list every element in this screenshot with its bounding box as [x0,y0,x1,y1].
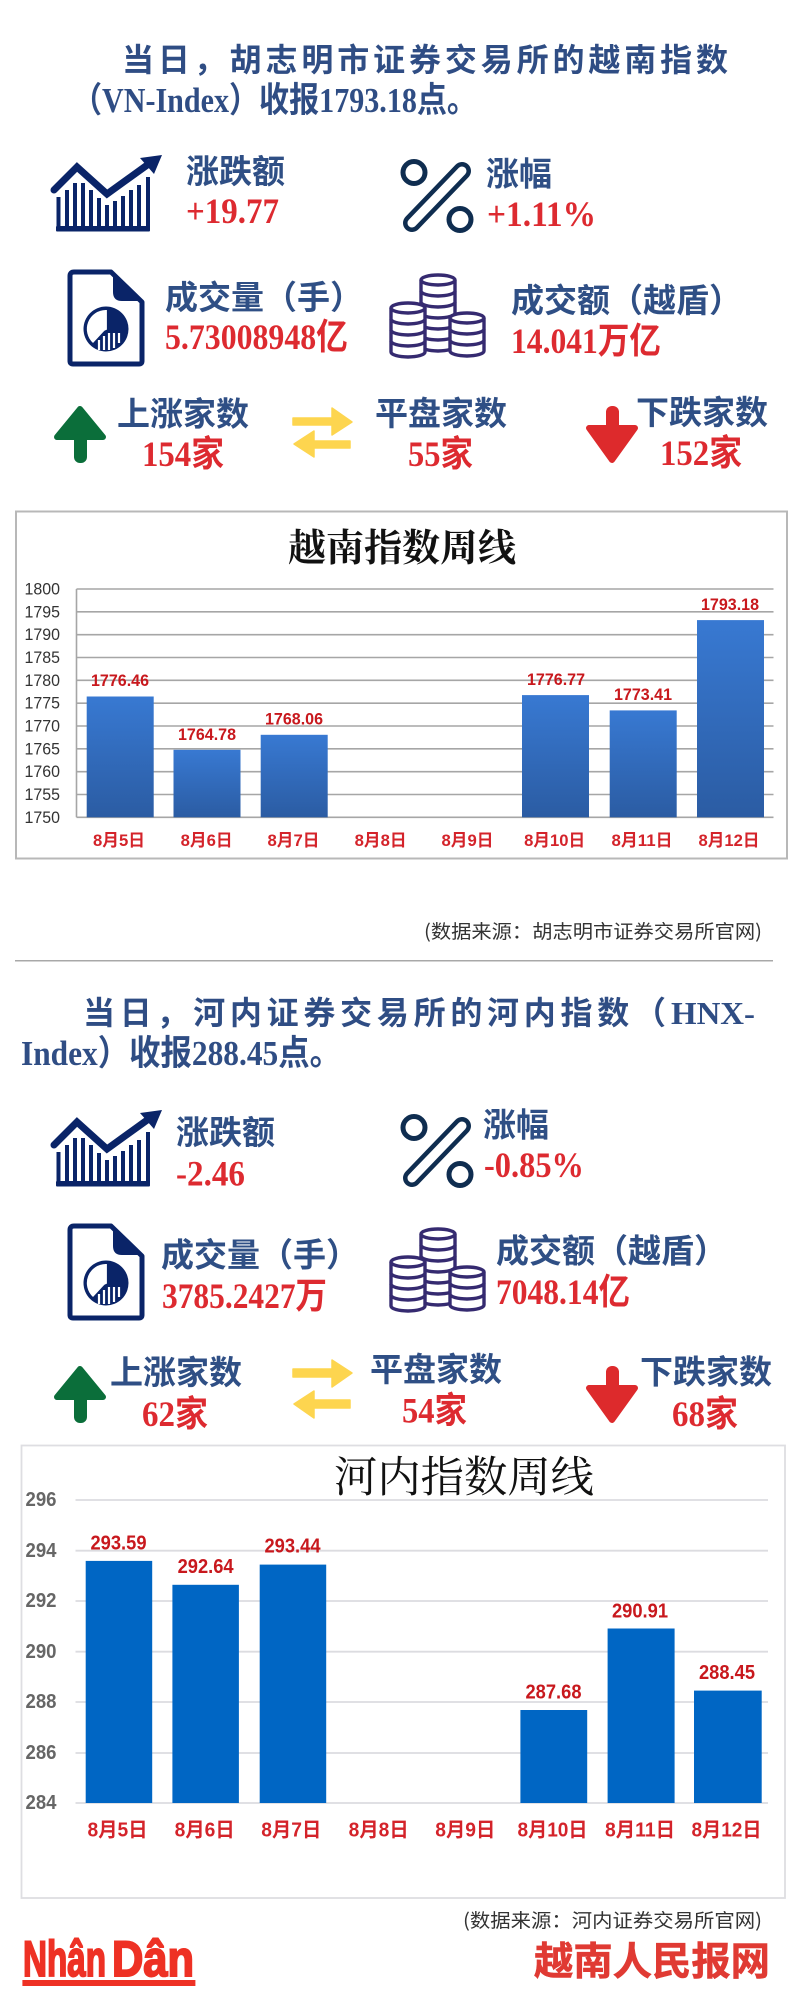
heading: VN-Index: 当日，胡志明市证券交易所的越南指数 [122,35,728,81]
stat: advancers: 上涨家数 [117,388,249,436]
bar value labels: 293.59 [90,1532,146,1554]
heading: HNX-Index [21,988,755,1073]
stat: volume: 成交量（手） [161,1228,359,1276]
heading: VN-Index [72,35,728,120]
date labels: 8月9日 [442,831,494,850]
heading: HNX-Index: HNX- [671,995,755,1031]
date labels: 8月10日 [524,831,585,850]
stat: change percent: 涨幅 [483,1098,549,1146]
stat: advancers [110,1346,242,1434]
stat: advancers: 上涨家数 [110,1346,242,1394]
bars [87,620,764,817]
y axis labels: 286 [26,1742,56,1764]
bars [86,1561,762,1803]
stat: turnover [496,1224,727,1312]
icon: down arrow [589,1366,635,1420]
stat: advancers [117,388,249,474]
stat: volume: 3785.2427万 [162,1276,327,1316]
bar value labels: 290.91 [612,1600,668,1622]
y axis labels: 288 [26,1691,56,1713]
stat: change percent: -0.85% [484,1145,584,1185]
stat: advancers: 62家 [142,1394,208,1434]
stat: volume [161,1228,359,1316]
stat: change amount: 涨跌额 [176,1106,275,1154]
bar value labels: 288.45 [699,1662,755,1684]
y axis labels [24,580,60,827]
stat: turnover: 成交额（越盾） [496,1224,727,1272]
stat: decliners: 下跌家数 [636,386,768,434]
stat: decliners [640,1346,772,1434]
bar value labels: 293.44 [264,1536,321,1558]
y axis labels: 1760 [24,762,60,781]
stat: decliners: 68家 [672,1394,738,1434]
stat: unchanged [370,1343,502,1430]
stat: change percent: +1.11% [487,194,596,234]
bar value labels: 1773.41 [614,685,672,704]
stat: change amount [186,145,285,231]
stat: change amount: 涨跌额 [186,145,285,193]
date labels: 8月6日 [181,831,233,850]
bar value labels: 1768.06 [265,710,323,728]
bar value labels: 1793.18 [701,595,759,614]
y axis labels: 1800 [24,580,60,598]
y axis labels: 1755 [24,785,60,804]
y axis labels [26,1489,57,1814]
stat: turnover [511,274,742,361]
icon: up arrow [57,409,103,463]
date labels: 8月10日 [518,1820,588,1842]
stat: unchanged: 54家 [402,1390,467,1430]
icon: swap arrows [293,1360,352,1418]
date labels: 8月12日 [698,831,760,850]
date labels: 8月8日 [349,1820,409,1842]
stat: change amount: +19.77 [186,191,279,231]
stat: volume: 成交量（手） [165,271,363,319]
date labels: 8月5日 [88,1820,148,1842]
bar value labels [91,595,759,744]
bar value labels [90,1532,755,1704]
icon: swap arrows [293,408,352,457]
y axis labels: 1765 [24,739,60,758]
source note: (数据来源：胡志明市证券交易所官网) [424,917,762,944]
y axis labels: 1775 [24,694,60,713]
y axis labels: 296 [26,1489,56,1511]
date labels: 8月6日 [175,1820,235,1842]
stat: turnover: 14.041万亿 [511,321,661,361]
bar value labels: 292.64 [178,1556,234,1578]
y axis labels: 284 [26,1792,57,1814]
logo: Nhan Dan: Nhân [23,1931,106,1987]
y axis labels: 1770 [24,716,60,736]
icon: percent [403,1116,471,1186]
icon: percent [403,162,471,230]
icon: coins [391,1229,484,1311]
source note: (数据来源：河内证券交易所官网) [463,1906,762,1933]
stat: change amount: -2.46 [176,1154,245,1194]
chart title: 越南指数周线 [288,517,516,572]
stat: decliners: 下跌家数 [640,1346,772,1394]
stat: change amount [176,1106,275,1194]
logo: Nhan Dan: Dân [112,1931,194,1987]
stat: unchanged: 平盘家数 [370,1343,502,1391]
heading: VN-Index: （VN-Index）收报1793.18点。 [72,81,477,120]
heading: HNX-Index: Index）收报288.45点。 [21,1034,341,1073]
stat: turnover: 成交额（越盾） [511,274,742,322]
y axis labels: 292 [26,1590,56,1612]
chart title: 河内指数周线 [334,1444,594,1505]
stat: change percent: 涨幅 [486,148,552,196]
stat: unchanged: 平盘家数 [375,387,507,435]
stat: turnover: 7048.14亿 [496,1272,630,1312]
stat: advancers: 154家 [142,434,224,474]
date labels: 8月8日 [355,831,407,850]
y axis labels: 294 [26,1540,57,1562]
date labels: 8月5日 [93,831,145,850]
stat: decliners [636,386,768,473]
chart: HNX-Index weekly bars [22,1444,785,1898]
stat: change percent [483,1098,584,1185]
icon: document [70,1226,142,1318]
stat: decliners: 152家 [660,433,742,473]
date labels: 8月11日 [612,831,672,850]
bar value labels: 287.68 [526,1682,582,1704]
date labels: 8月12日 [692,1820,762,1842]
icon: rising chart [54,1110,162,1186]
heading: HNX-Index: 当日，河内证券交易所的河内指数（ [83,988,666,1034]
stat: change percent [486,148,596,234]
stat: volume [165,271,363,357]
date labels: 8月11日 [605,1820,675,1842]
icon: down arrow [589,406,635,460]
y axis labels: 290 [26,1641,56,1663]
date labels: 8月9日 [435,1820,495,1842]
date labels: 8月7日 [268,831,320,850]
date labels [88,1820,762,1842]
panel: HNX-Index summary [21,988,772,1434]
bar value labels: 1776.77 [527,670,585,689]
stat: volume: 5.73008948亿 [165,317,348,357]
panel: VN-Index summary [54,35,768,474]
y axis labels: 1790 [24,625,60,644]
y axis labels: 1750 [24,808,60,827]
stat: unchanged: 55家 [408,434,473,474]
icon: coins [391,275,484,357]
icon: rising chart [54,155,162,232]
y axis labels: 1795 [24,602,60,621]
bar value labels: 1764.78 [178,725,236,744]
chart: VN-Index weekly bars [16,512,787,858]
date labels: 8月7日 [261,1820,321,1842]
y axis labels: 1780 [24,671,60,690]
y axis labels: 1785 [24,648,60,667]
stat: unchanged [375,387,507,474]
icon: document [70,272,142,364]
icon: up arrow [57,1369,103,1423]
logo: Vietnamese People's Daily Chinese name: 越南人民报网 [534,1931,770,1987]
date labels [93,831,760,850]
bar value labels: 1776.46 [91,671,149,690]
